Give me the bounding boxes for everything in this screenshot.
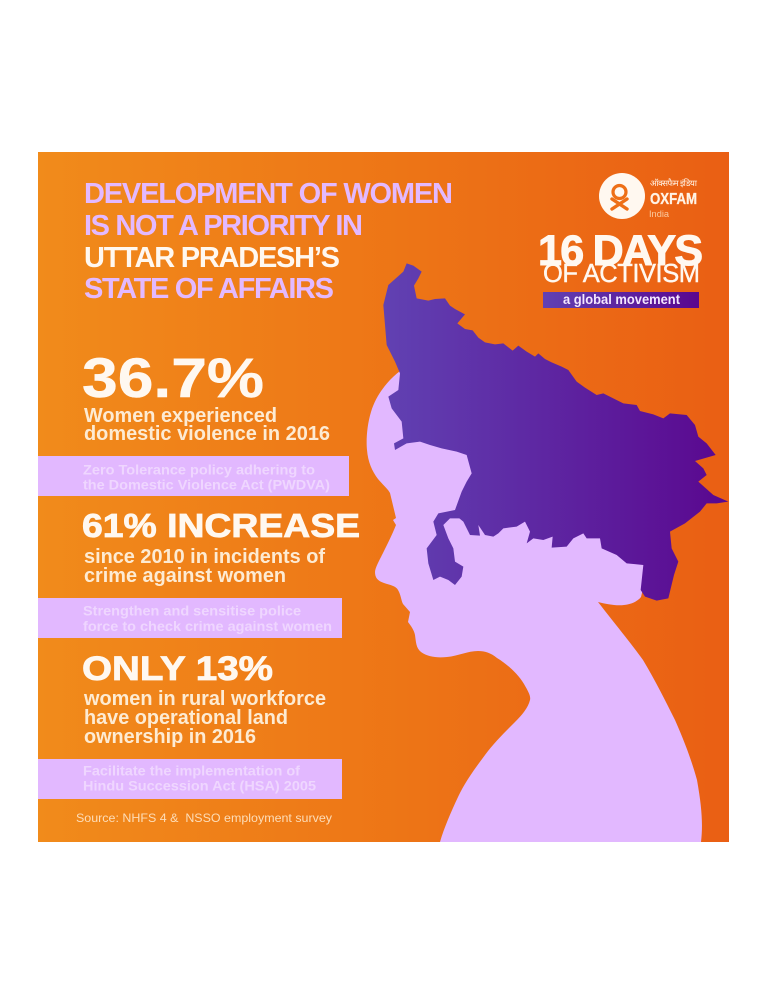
title: DEVELOPMENT OF WOMEN — [84, 178, 453, 210]
orange background panel — [38, 152, 729, 842]
recommendation bar 3: Hindu Succession Act (HSA) 2005 — [83, 778, 316, 794]
stat: only 13%: have operational land — [84, 707, 288, 729]
recommendation bar 2 — [38, 598, 342, 638]
recommendation bar 1: Zero Tolerance policy adhering to — [83, 462, 315, 478]
title: UTTAR PRADESH’S — [84, 242, 340, 274]
16 days of activism: 16 DAYS — [538, 227, 703, 275]
title: IS NOT A PRIORITY IN — [84, 210, 363, 242]
recommendation bar 1 — [38, 456, 349, 496]
stat: 36.7%: Women experienced — [84, 405, 277, 427]
stat: 61% increase: crime against women — [84, 565, 286, 587]
woman head silhouette — [367, 371, 702, 842]
recommendation bar 3 — [38, 759, 342, 799]
title — [84, 178, 453, 305]
a global movement banner: a global movement — [563, 291, 680, 307]
stat: 36.7% — [82, 346, 330, 445]
logo wordmark: India — [649, 209, 670, 220]
stat: only 13%: ownership in 2016 — [84, 726, 256, 748]
stat: 61% increase — [82, 507, 360, 587]
stat: 61% increase: since 2010 in incidents of — [84, 546, 325, 568]
logo circle emblem — [599, 173, 645, 219]
recommendation bar 2: Strengthen and sensitise police — [83, 602, 301, 618]
stat: only 13%: women in rural workforce — [83, 688, 326, 710]
Oxfam logo — [599, 173, 698, 220]
stat: 36.7%: domestic violence in 2016 — [84, 423, 330, 445]
16 days of activism: OF ACTIVISM — [543, 260, 700, 288]
stat: 36.7%: 36.7% — [82, 346, 264, 409]
recommendation bar 3: Facilitate the implementation of — [83, 762, 300, 778]
Uttar Pradesh map — [383, 263, 728, 601]
recommendation bar 2: force to check crime against women — [83, 618, 332, 634]
title: STATE OF AFFAIRS — [84, 273, 334, 305]
recommendation bar 1: the Domestic Violence Act (PWDVA) — [83, 476, 330, 492]
stat: 61% increase: 61% INCREASE — [82, 507, 360, 544]
logo wordmark: OXFAM — [650, 191, 697, 208]
stat: only 13%: ONLY 13% — [82, 650, 273, 688]
logo wordmark — [649, 178, 698, 220]
logo wordmark: ऑक्सफैम इंडिया — [650, 178, 698, 188]
source note: Source: NHFS 4 & NSSO employment survey — [76, 811, 332, 825]
stat: only 13% — [82, 650, 326, 748]
